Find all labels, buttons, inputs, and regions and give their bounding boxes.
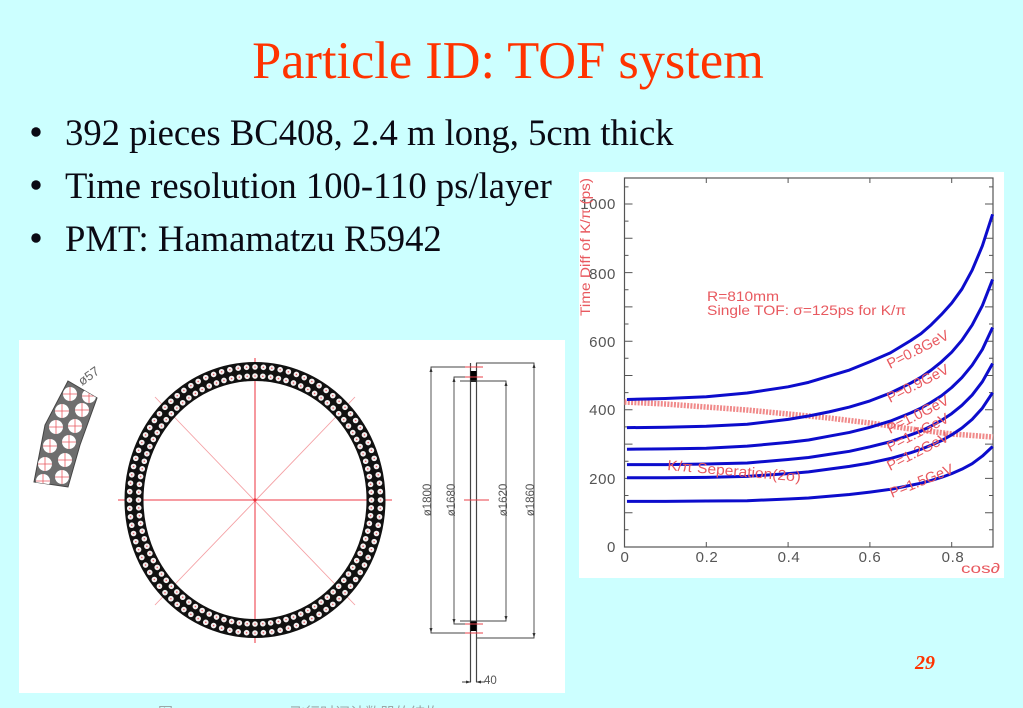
side view with dimensions: ø1800 [422, 484, 434, 516]
y axis tick labels: 400 [589, 402, 616, 419]
curve P=1.0GeV [627, 327, 993, 449]
chart axes frame [624, 178, 993, 547]
bullet list [31, 112, 674, 259]
y axis tick labels: 0 [607, 539, 616, 556]
y axis title: Time Diff of K/π (ps) [577, 178, 593, 316]
x axis tick labels: 0.6 [859, 549, 881, 566]
sector detail [34, 363, 102, 488]
curve labels: P=1.1GeV [885, 411, 952, 456]
annotation: radius and resolution: R=810mm [707, 288, 779, 304]
K/pi separation band [624, 402, 993, 437]
separation label: K/π Seperation(2σ) [667, 458, 802, 486]
momentum curves [627, 214, 993, 501]
outer row of tubes [130, 367, 380, 633]
curve P=1.2GeV [627, 393, 993, 478]
x axis tick labels: 0.2 [696, 549, 718, 566]
curve P=1.1GeV [627, 363, 993, 465]
sector detail: ø57 [75, 363, 102, 388]
curve labels: P=1.2GeV [885, 430, 952, 475]
side view with dimensions: ø1860 [525, 484, 537, 516]
x axis tick labels: 0.4 [778, 549, 800, 566]
annotation: radius and resolution [707, 288, 906, 318]
ring body [134, 372, 376, 628]
inner row of tubes [138, 376, 372, 624]
panel: chart of K/pi time difference [577, 172, 1004, 578]
x axis tick labels: 0 [621, 549, 629, 566]
x axis tick labels: 0.8 [942, 549, 964, 566]
curve labels: P=1.0GeV [885, 393, 952, 438]
curve labels [885, 328, 956, 502]
ring centre lines [155, 397, 355, 605]
bullet: scintillator: 392 pieces BC408, 2.4 m long, 5cm thick [65, 112, 674, 153]
panel: detector drawing [19, 340, 565, 693]
curve labels: P=0.9GeV [885, 362, 952, 407]
curve P=0.9GeV [627, 279, 993, 428]
bullet: time resolution: Time resolution 100-110 ps/layer [65, 165, 552, 206]
x axis title: cos∂ [961, 560, 1000, 576]
y axis tick labels [580, 196, 616, 556]
title: Particle ID: TOF system [252, 32, 764, 90]
curve labels: P=0.8GeV [885, 328, 952, 373]
y axis tick labels: 200 [589, 471, 616, 488]
side view with dimensions: ø1620 [498, 484, 510, 516]
curve P=1.5GeV [627, 447, 993, 501]
ring diagram [118, 358, 392, 643]
page number: 29 [914, 652, 935, 674]
y axis tick labels: 600 [589, 334, 616, 351]
x axis tick labels [621, 549, 964, 566]
side view with dimensions: 40 [484, 675, 497, 687]
curve P=0.8GeV [627, 214, 993, 400]
bullet: PMT: PMT: Hamamatzu R5942 [65, 218, 442, 259]
annotation: radius and resolution: Single TOF: σ=125ps for K/π [707, 302, 906, 318]
y axis tick labels: 800 [589, 266, 616, 283]
side view with dimensions [422, 363, 537, 687]
y axis tick labels: 1000 [580, 196, 616, 213]
curve labels: P=1.5GeV [888, 462, 956, 502]
side view with dimensions: ø1680 [446, 484, 458, 516]
